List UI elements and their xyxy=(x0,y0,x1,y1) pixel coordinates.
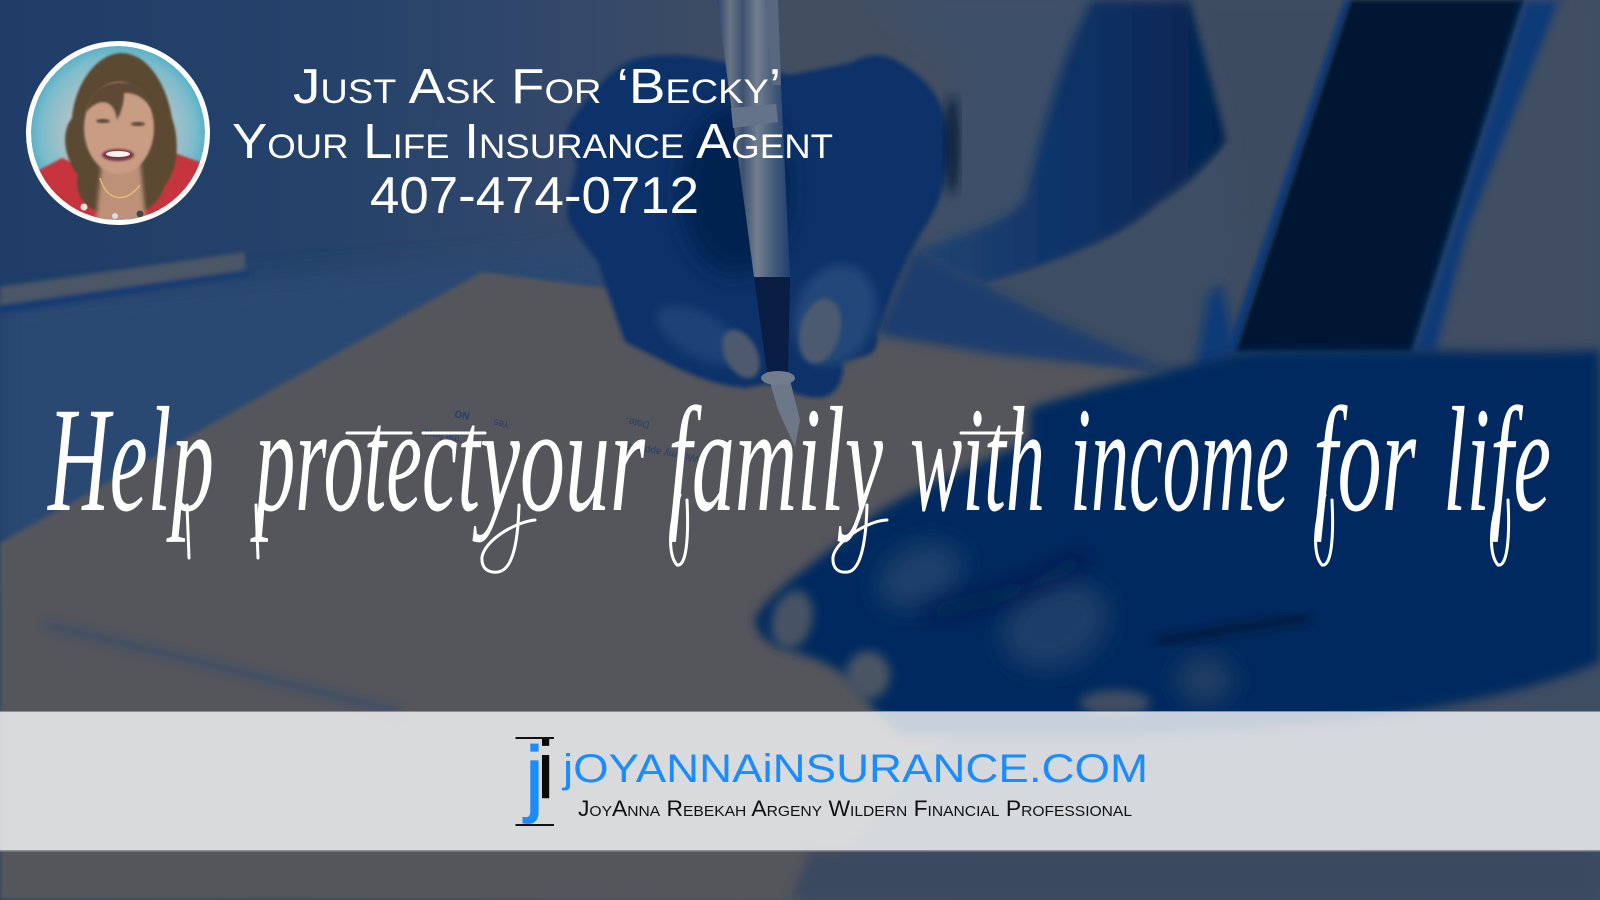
lapel edge xyxy=(1226,0,1351,352)
necklace xyxy=(100,178,140,198)
upside-down form text on paper: Date: xyxy=(625,415,651,430)
upside-down form text on paper: Yes xyxy=(493,416,511,430)
lips xyxy=(102,149,134,161)
agent full name: JoyAnna Rebekah Argeny Wildern Financial Professional xyxy=(578,796,1132,821)
main script headline: with xyxy=(910,376,1045,543)
upside-down form text on paper: the final xyxy=(424,427,461,444)
fountain pen xyxy=(717,0,800,447)
pen clip xyxy=(765,0,781,85)
blue shirt placket xyxy=(1412,0,1562,352)
website: jOYANNAiNSURANCE.COM xyxy=(562,747,1148,791)
thumbnail xyxy=(793,294,847,368)
face xyxy=(84,82,154,174)
left finger highlight xyxy=(647,293,753,377)
jacket xyxy=(38,152,200,220)
resting hand xyxy=(755,350,1600,735)
portrait: Becky xyxy=(26,41,210,225)
wrist shadow xyxy=(877,250,1172,372)
logo monogram: i xyxy=(536,725,555,816)
writing hand xyxy=(567,55,959,398)
hand creases xyxy=(925,555,1085,615)
light shirt cuff xyxy=(985,143,1250,374)
main script headline: income xyxy=(1070,376,1289,543)
main script headline: life xyxy=(1443,376,1551,543)
footer banner xyxy=(0,711,1600,852)
right shirt xyxy=(1438,0,1600,352)
line: your life insurance agent: Your Life Insurance Agent xyxy=(232,115,833,169)
main script headline: family xyxy=(668,376,883,543)
agent heading xyxy=(232,60,833,225)
fringe xyxy=(86,82,154,120)
hand shadow xyxy=(680,105,790,275)
teeth xyxy=(106,151,130,157)
dark tie xyxy=(1236,0,1524,352)
headline decorative flourishes xyxy=(187,433,1509,572)
upside-down form text on paper: With my approval xyxy=(623,440,701,464)
desk surface xyxy=(0,250,600,600)
line: just ask for Becky: Just Ask For ‘Becky’ xyxy=(293,60,781,114)
sleeve xyxy=(880,0,1100,290)
lower strip under banner xyxy=(790,851,1600,900)
upside-down form text on paper xyxy=(424,407,701,464)
logo monogram xyxy=(516,725,555,826)
thumb highlight xyxy=(780,252,890,378)
fingernail left xyxy=(715,324,767,384)
main script headline: your xyxy=(472,376,645,543)
main script headline: protect xyxy=(250,376,482,543)
area beside lapel xyxy=(1195,0,1351,372)
hair xyxy=(65,53,177,212)
main script headline: for xyxy=(1313,376,1416,543)
logo monogram: j xyxy=(522,730,544,825)
finger blurs xyxy=(765,529,1310,716)
eyes xyxy=(96,119,110,123)
blurred line on paper xyxy=(47,625,400,712)
neck and chest xyxy=(96,160,146,222)
line: phone number: 407-474-0712 xyxy=(370,167,699,225)
pen ring xyxy=(731,104,778,128)
main script headline xyxy=(47,376,1551,543)
cuff folds xyxy=(915,0,1228,284)
main script headline: Help xyxy=(47,376,214,543)
upside-down form text on paper: NO xyxy=(454,407,471,421)
paper document xyxy=(0,272,1180,900)
book on desk xyxy=(0,252,255,314)
